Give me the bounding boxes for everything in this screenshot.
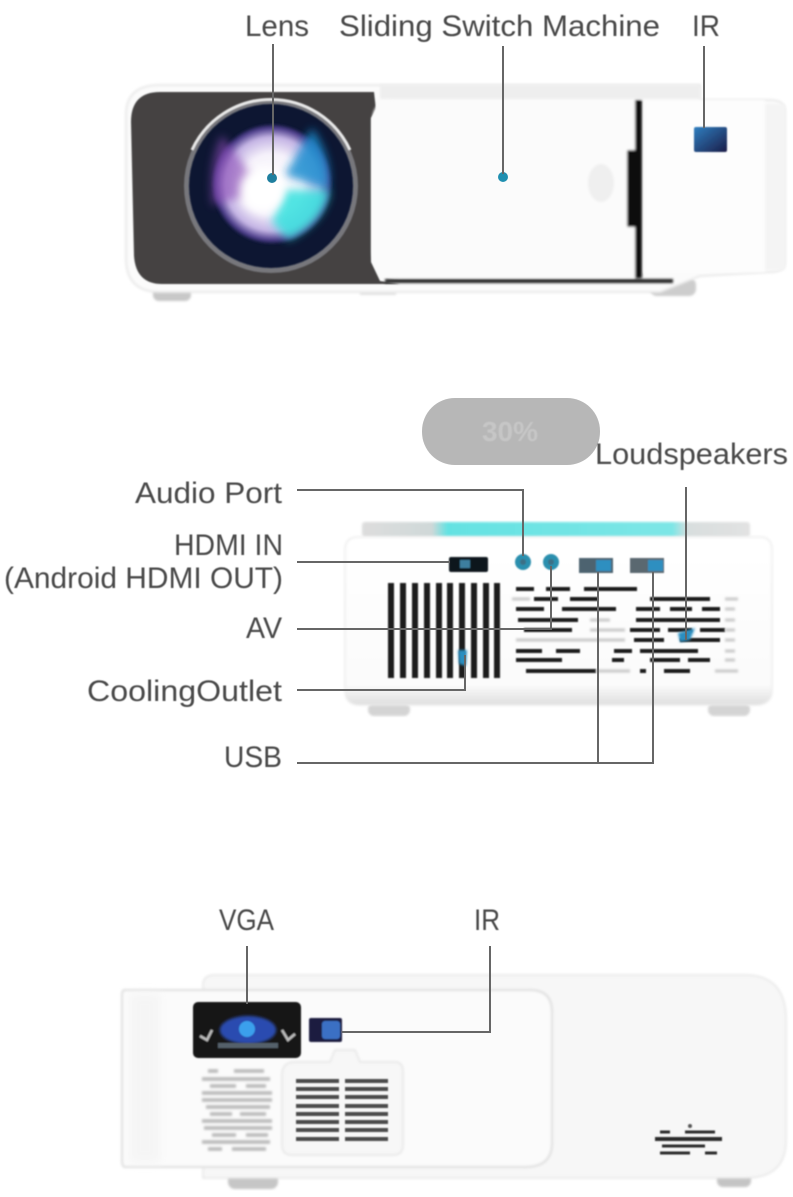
speaker grille bbox=[516, 589, 725, 671]
IR window bbox=[694, 127, 727, 152]
dark lens panel bbox=[131, 92, 400, 284]
label: HDMI IN bbox=[4, 529, 450, 595]
label: HDMI IN: HDMI IN bbox=[174, 529, 283, 562]
feet bbox=[368, 703, 750, 716]
watermark pill 30%: 30% bbox=[482, 416, 538, 447]
label: VGA: VGA bbox=[219, 904, 274, 937]
blue markers bbox=[458, 628, 695, 666]
label: IR side bbox=[342, 904, 500, 1032]
air filter vents bbox=[296, 1081, 388, 1139]
label: AV bbox=[246, 566, 551, 645]
projector: side view bbox=[122, 975, 786, 1189]
label: Audio Port: Audio Port bbox=[135, 477, 283, 510]
VGA port bbox=[193, 1002, 301, 1058]
feet bbox=[153, 278, 696, 301]
label: CoolingOutlet bbox=[87, 655, 465, 708]
projector: front view bbox=[126, 85, 785, 301]
cooling vents bbox=[388, 583, 500, 678]
label: IR top: IR bbox=[692, 10, 720, 43]
air filter panel bbox=[282, 1050, 403, 1155]
IR window bbox=[309, 1018, 342, 1042]
label: Lens: Lens bbox=[245, 10, 309, 43]
label: AV: AV bbox=[246, 612, 282, 645]
label: IR side: IR bbox=[474, 904, 500, 937]
sliding cover bbox=[372, 85, 785, 283]
sliding cover bbox=[122, 990, 552, 1167]
marker dots bbox=[267, 172, 508, 183]
upper body bbox=[203, 975, 786, 1178]
label: IR top bbox=[692, 10, 720, 128]
label: VGA bbox=[219, 904, 274, 1004]
watermark pill 30% bbox=[422, 398, 600, 465]
label: CoolingOutlet: CoolingOutlet bbox=[87, 675, 283, 708]
label: USB: USB bbox=[224, 741, 282, 774]
projector: rear view bbox=[345, 522, 772, 716]
top light strip bbox=[362, 522, 750, 537]
feet bbox=[228, 1172, 751, 1189]
lens bbox=[184, 99, 358, 273]
label: USB bbox=[224, 572, 653, 774]
label: Sliding Switch Machine: Sliding Switch Machine bbox=[339, 10, 660, 43]
side speaker grille bbox=[655, 1124, 722, 1153]
spec text block bbox=[202, 1071, 272, 1149]
label: Audio Port bbox=[135, 477, 523, 556]
ports bbox=[449, 554, 664, 573]
body bbox=[126, 85, 785, 292]
label: HDMI IN: (Android HDMI OUT) bbox=[4, 562, 283, 595]
label: Loudspeakers: Loudspeakers bbox=[595, 438, 788, 471]
body bbox=[345, 537, 772, 705]
